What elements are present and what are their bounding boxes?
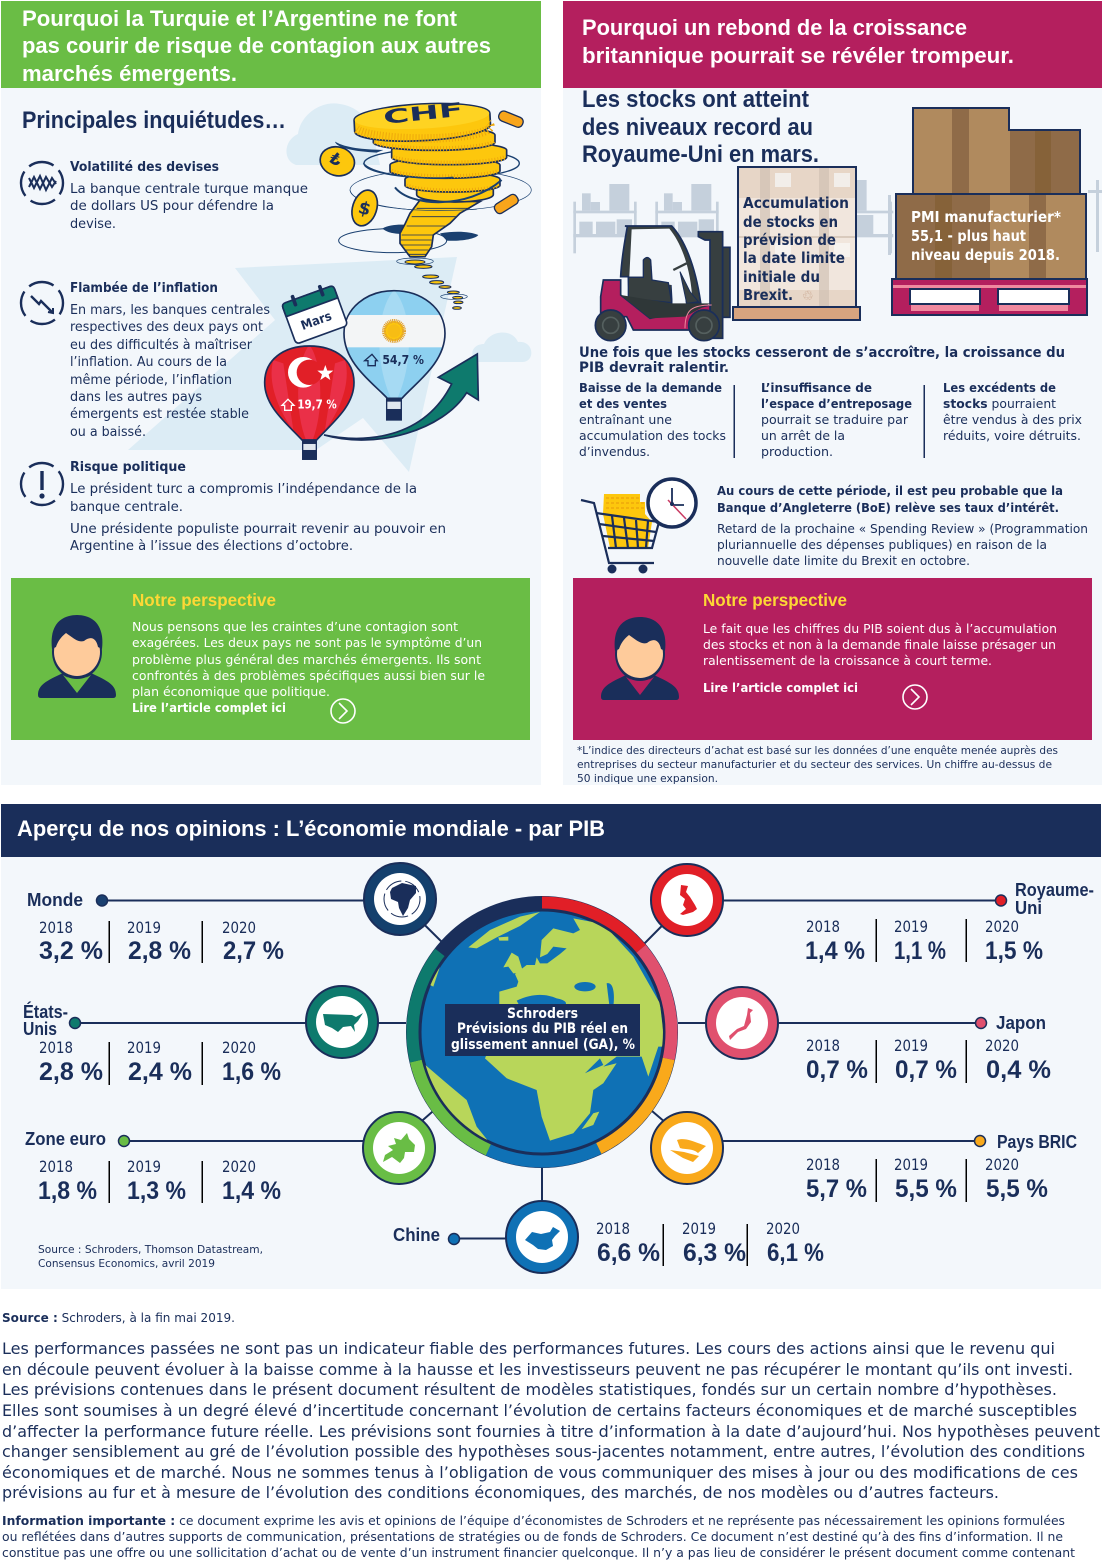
data: United Kingdom: 2019 [894,917,928,936]
data: BRIC countries: 2020 [985,1155,1019,1174]
text column: storage: L’insuffisance de [761,381,872,396]
callout: our perspective magenta: Notre perspective [703,590,847,610]
subheading: main concerns: Principales inquiétudes… [22,107,286,134]
callout: our perspective magenta: Lire l’article complet ici [703,681,858,696]
callout: our perspective magenta: ralentissement de la croissance à court terme. [703,654,992,669]
source note [38,1243,263,1270]
text block: past performance disclaimer: Les performances passées ne sont pas un indicateur fiable des performances futures. Les cours des actions ainsi que le revenu qui [2,1339,1055,1358]
right heading banner: britannique pourrait se révéler trompeur. [582,43,1014,68]
data: world [27,890,284,965]
callout: our perspective green: exagérées. Les deux pays ne sont pas le symptôme d’un [132,636,482,651]
text block: Bank of England: Retard de la prochaine « Spending Review » (Programmation [717,522,1088,537]
text block: political risk [70,459,446,554]
icon: United Kingdom [651,864,723,936]
text block: currency volatility: de dollars US pour défendre la [70,198,274,214]
connector lines [75,900,1001,1238]
source note: Consensus Economics, avril 2019 [38,1257,215,1270]
text block: political risk: Une présidente populiste pourrait revenir au pouvoir en [70,521,446,537]
callout: our perspective green: Lire l’article complet ici [132,701,286,716]
left heading banner [1,1,541,88]
illustration: pallet with PMI box: PMI manufacturier* [911,208,1061,226]
illustration: stacked stock box with text: Brexit. [743,286,793,304]
text block: past performance disclaimer: en découle peuvent évoluer à la baisse comme à la hausse et les investisseurs peuvent ne pas récupérer le montant qu’ils ont investi. [2,1360,1073,1379]
data: China: 2020 [766,1219,800,1238]
icon: world [364,863,436,935]
illustration: stacked stock box with text: prévision de [743,231,836,249]
data: BRIC countries: 2019 [894,1155,928,1174]
label: Schroders forecast: Prévisions du PIB réel en [457,1021,628,1037]
data: United Kingdom: 2020 [985,917,1019,936]
data: China: 2018 [596,1219,630,1238]
icon: political risk [21,463,63,505]
data: China: Chine [393,1225,440,1245]
illustration: balloons, calendar and arrow [265,281,478,460]
text block: political risk: Argentine à l’issue des élections d’octobre. [70,538,353,554]
icon: person [601,617,679,700]
callout: our perspective magenta [573,578,1092,740]
text block: past performance disclaimer: changer sensiblement au gré de l’évolution possible des hypothèses sous-jacentes notamment, entre autres, l’évolution des conditions [2,1442,1085,1461]
text block: inflation: En mars, les banques centrales [70,302,270,318]
text block: important information [2,1514,1075,1561]
right heading banner [563,1,1102,88]
illustration: pallet with PMI box [892,108,1087,315]
data: United Kingdom: Uni [1015,898,1042,918]
illustration: stacked stock box with text: ♲ [802,289,814,304]
flying coin: lira [317,143,358,180]
panel: United Kingdom [563,1,1102,785]
text block: political risk: Le président turc a compromis l’indépendance de la [70,481,417,497]
data: world: 2018 [39,918,73,937]
data: world: 2020 [222,918,256,937]
left heading banner: marchés émergents. [22,61,237,86]
callout: our perspective green: problème plus général des marchés émergents. Ils sont [132,653,481,668]
heading: GDP slowdown: Une fois que les stocks cesseront de s’accroître, la croissance du [579,345,1065,361]
data: world: 2019 [127,918,161,937]
data: BRIC countries [806,1132,1077,1203]
text column: storage: un arrêt de la [761,429,845,444]
balloon: Turkey 19,7 % [265,345,354,460]
data: United States: 2020 [222,1038,256,1057]
globe land masses [423,912,665,1143]
callout: our perspective magenta: des stocks et non à la demande finale laisse présager un [703,638,1056,653]
illustration: stacked stock box with text: Accumulation [743,194,849,212]
text block: inflation: émergents est restée stable [70,406,249,422]
flying coin: dollar: $ [356,198,373,221]
data: euro zone: 1,8 % [38,1177,97,1205]
data: world: 3,2 % [39,937,103,965]
icon: arrow button [331,699,355,723]
data: China: 6,6 % [597,1239,660,1267]
icon: BRIC handshake [651,1112,723,1184]
text block: political risk: banque centrale. [70,499,183,515]
text column: demand: accumulation des tocks [579,429,726,444]
icon: China [506,1201,578,1273]
text block: past performance disclaimer: Elles sont soumises à un degré élevé d’incertitude concernant l’évolution de certains facteurs économiques et de marché susceptibles [2,1401,1077,1420]
icon: rising arrow [324,354,478,440]
data: United States: 2,4 % [128,1058,192,1086]
text block: Bank of England: pluriannuelle des dépenses publiques) en raison de la [717,538,1047,553]
icon: inflation [21,282,63,324]
data: United Kingdom: Royaume- [1015,880,1094,900]
text block: Bank of England: Banque d’Angleterre (BoE) relève ses taux d’intérêt. [717,501,1059,516]
heading banner [1,804,1101,857]
heading banner: Aperçu de nos opinions : L’économie mondiale - par PIB [17,816,605,841]
background shelf far right [888,180,1102,255]
icon: Japan [706,987,778,1059]
text column: surplus: réduits, voire détruits. [943,429,1081,444]
data: United States: Unis [23,1019,57,1039]
footnote: *L’indice des directeurs d’achat est basé sur les données d’une enquête menée auprès des [577,744,1058,757]
data: Japan: 0,7 % [806,1056,868,1084]
text column: surplus: Les excédents de [943,381,1056,396]
data: United States: États- [23,1001,68,1022]
footnote [577,744,1058,785]
right heading banner: Pourquoi un rebond de la croissance [582,15,967,40]
callout: our perspective green: confrontés à des problèmes spécifiques aussi bien sur le [132,669,485,684]
callout: our perspective green [11,578,530,740]
data: world: 2,7 % [223,937,284,965]
data: Japan: 2018 [806,1036,840,1055]
illustration: pallet with PMI box: niveau depuis 2018. [911,246,1060,264]
text column: surplus [943,381,1082,444]
balloon: Argentina 54,7 % [340,290,450,421]
label: Schroders forecast: Schroders [507,1006,578,1022]
illustration: stacked stock box with text [733,167,860,320]
text column: storage [761,381,912,460]
text block: past performance disclaimer: Les prévisions contenues dans le présent document résultent de modèles statistiques, fondés sur un certain nombre d’hypothèses. [2,1380,1057,1399]
data: BRIC countries: 5,5 % [986,1175,1048,1203]
text block: past performance disclaimer: d’affecter la performance future réelle. Les prévisions sont fournies à titre d’information à la date d’aujourd’hui. Nos hypothèses peuvent [2,1422,1100,1441]
data: United Kingdom: 2018 [806,917,840,936]
data: world: Monde [27,890,83,910]
text block: important information: ou reflétées dans d’autres supports de communication, présentations de stratégies ou de fonds de Schroders. Ce document n’est destiné qu’à des fins d’information. Il ne [2,1530,1063,1545]
flying coin: edge right [493,193,520,215]
globe with coloured ring [406,896,678,1168]
illustration: coin tornado [317,98,531,309]
text block: currency volatility [70,159,308,232]
panel: world economy overview [1,804,1101,1289]
data: Japan: 2019 [894,1036,928,1055]
data: Japan: 0,7 % [895,1056,957,1084]
balloon: Turkey 19,7 %: 19,7 % [297,396,337,411]
callout: our perspective green: Notre perspective [132,590,276,610]
footnote: entreprises du secteur manufacturier et du secteur des services. Un chiffre au-dessus de [577,758,1052,771]
data: China: 6,3 % [683,1239,746,1267]
data: euro zone [25,1129,281,1205]
subheading: record stocks [582,86,819,168]
subheading: record stocks: Royaume-Uni en mars. [582,141,819,168]
icon: arrow button [903,685,927,709]
text block: inflation: même période, l’inflation [70,372,232,388]
icon: calendar March [280,281,348,344]
data: BRIC countries: 5,7 % [806,1175,867,1203]
heading: GDP slowdown: PIB devrait ralentir. [579,360,729,376]
balloon: Argentina 54,7 %: 54,7 % [382,352,424,367]
text block: currency volatility: La banque centrale turque manque [70,181,308,197]
data: United Kingdom: 1,1 % [894,937,946,965]
text block: Bank of England: Au cours de cette période, il est peu probable que la [717,484,1063,499]
connector end dots [70,895,1006,1244]
illustration: stacked stock box with text: la date limite [743,249,845,267]
data: China: 2019 [682,1219,716,1238]
text column: storage: l’espace d’entreposage [761,397,912,412]
text block: inflation: ou a baissé. [70,424,146,440]
text block: currency volatility: devise. [70,216,116,232]
text column: demand: d’invendus. [579,445,650,460]
text column: storage: pourrait se traduire par [761,413,909,428]
data: Japan [806,1013,1051,1084]
data: euro zone: 2020 [222,1157,256,1176]
data: United States: 2019 [127,1038,161,1057]
text block: inflation: eu des difficultés à maîtriser [70,337,252,353]
background warehouse shelves [573,180,893,253]
background cloud top [286,103,380,165]
icon: person [38,615,116,698]
illustration: stacked stock box with text: initiale du [743,268,820,286]
data: euro zone: 1,3 % [127,1177,186,1205]
text column: surplus: stocks pourraient [943,397,1056,412]
text column: demand: entraînant une [579,413,672,428]
data: BRIC countries: 5,5 % [895,1175,957,1203]
illustration: stacked stock box with text: de stocks en [743,213,838,231]
text block: important information: constitue pas une offre ou une sollicitation d’achat ou de vente d’un instrument financier quelconque. Il n’y a pas lieu de considérer le présent document comme contenant [2,1546,1075,1561]
text block: past performance disclaimer: économiques et de marché. Nous ne sommes tenus à l’obligation de vous communiquer des mises à jour ou des modifications de ces [2,1463,1078,1482]
source line: Source : Schroders, à la fin mai 2019. [2,1310,235,1325]
data: BRIC countries: 2018 [806,1155,840,1174]
footnote: 50 indique une expansion. [577,772,718,785]
data: euro zone: 2018 [39,1157,73,1176]
data: Japan: 0,4 % [986,1056,1051,1084]
text block: Bank of England [717,484,1088,569]
label: Schroders forecast: glissement annuel (GA), % [451,1037,635,1053]
data: United Kingdom: 1,4 % [805,937,865,965]
icon: calendar March: Mars [299,308,334,333]
data: Japan: Japon [996,1013,1046,1033]
subheading: record stocks: Les stocks ont atteint [582,86,809,113]
data: China [393,1219,824,1267]
text block: inflation: respectives des deux pays ont [70,319,264,335]
illustration: forklift [595,226,730,341]
text column: demand: et des ventes [579,397,667,412]
text block: Bank of England: nouvelle date limite du Brexit en octobre. [717,554,970,569]
data: United States [23,1001,281,1086]
text block: past performance disclaimer [2,1339,1100,1502]
left heading banner: pas courir de risque de contagion aux autres [22,33,491,58]
illustration: pallet with PMI box: 55,1 - plus haut [911,227,1026,245]
text block: past performance disclaimer: prévisions au fur et à mesure de l’évolution des conditions économiques, des marchés, de nos modèles ou d’autres facteurs. [2,1483,999,1502]
icon: shopping cart with coins and clock [581,479,696,574]
background shape: light star [128,257,457,472]
subheading: record stocks: des niveaux record au [582,114,813,141]
text block: inflation: Flambée de l’inflation [70,280,218,296]
flying coin: lira: ₺ [325,149,347,171]
data: United Kingdom [805,880,1094,965]
data: euro zone: 1,4 % [222,1177,281,1205]
data: euro zone: 2019 [127,1157,161,1176]
panel: Turkey and Argentina [1,1,541,785]
icon: Europe [363,1112,435,1184]
text block: inflation [70,280,270,440]
callout: our perspective magenta: Le fait que les chiffres du PIB soient dus à l’accumulation [703,622,1057,637]
background cloud right [472,332,531,362]
heading: GDP slowdown [579,345,1065,376]
callout: our perspective green: plan économique que politique. [132,685,330,700]
text block: important information: Information importante : ce document exprime les avis et opinions de l’équipe d’économistes de Schroders et ne représente pas nécessairement les opinions formulées [2,1514,1065,1529]
icon: United States [306,986,378,1058]
data: United Kingdom: 1,5 % [985,937,1043,965]
text column: surplus: être vendus à des prix [943,413,1082,428]
left heading banner: Pourquoi la Turquie et l’Argentine ne font [22,6,457,31]
text column: storage: production. [761,445,833,460]
data: BRIC countries: Pays BRIC [997,1132,1077,1152]
text column: demand [579,381,726,460]
data: United States: 2018 [39,1038,73,1057]
flying coin: edge top right [497,110,525,129]
data: euro zone: Zone euro [25,1129,106,1149]
flying coin: dollar [348,187,382,229]
data: China: 6,1 % [767,1239,824,1267]
icon: currency volatility [21,162,63,204]
data: world: 2,8 % [128,937,191,965]
text block: currency volatility: Volatilité des devises [70,159,219,175]
data: United States: 2,8 % [39,1058,103,1086]
coin symbol: Swiss franc: CHF [382,98,464,129]
data: Japan: 2020 [985,1036,1019,1055]
text block: inflation: l’inflation. Au cours de la [70,354,227,370]
text block: inflation: dans les autres pays [70,389,202,405]
text column: demand: Baisse de la demande [579,381,722,396]
source note: Source : Schroders, Thomson Datastream, [38,1243,263,1256]
label: Schroders forecast [445,1004,640,1056]
data: United States: 1,6 % [222,1058,281,1086]
text block: political risk: Risque politique [70,459,186,475]
callout: our perspective green: Nous pensons que les craintes d’une contagion sont [132,620,458,635]
